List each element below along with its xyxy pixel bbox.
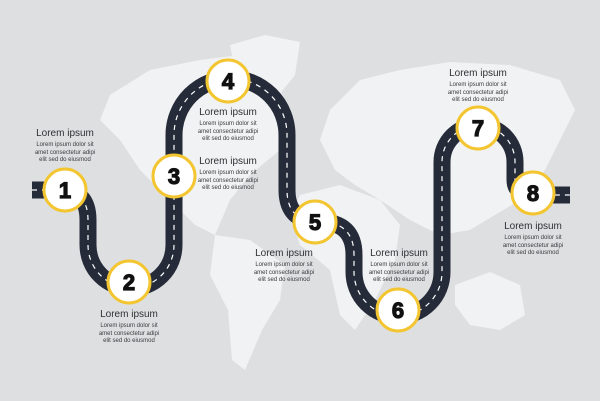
circle 3	[153, 155, 195, 197]
label 5: Lorem ipsum dolor sit	[255, 262, 313, 268]
label 6: elit sed do eiusmod	[373, 277, 425, 283]
circle 2: 2	[123, 270, 135, 295]
label 5: Lorem ipsum	[255, 248, 313, 259]
label 3: Lorem ipsum dolor sit	[199, 170, 257, 176]
circle 4: 4	[222, 69, 235, 94]
circle 2	[108, 261, 150, 303]
circle 8	[512, 172, 554, 214]
label 1	[35, 128, 95, 163]
label 7: Lorem ipsum	[449, 68, 507, 79]
label 4: amet consectetur adipi	[198, 128, 258, 134]
label 6: amet consectetur adipi	[369, 270, 429, 276]
label 7: elit sed do eiusmod	[452, 97, 504, 103]
label 6: Lorem ipsum dolor sit	[370, 262, 428, 268]
label 8: elit sed do eiusmod	[507, 250, 559, 256]
label 7	[448, 68, 508, 103]
label 8	[503, 221, 563, 256]
label 5: amet consectetur adipi	[254, 270, 314, 276]
label 8: Lorem ipsum	[504, 221, 562, 232]
circle 6	[377, 289, 419, 331]
label 1: Lorem ipsum dolor sit	[36, 142, 94, 148]
label 1: elit sed do eiusmod	[39, 157, 91, 163]
circle 5: 5	[309, 210, 321, 235]
label 2: elit sed do eiusmod	[103, 338, 155, 344]
label 1: Lorem ipsum	[36, 128, 94, 139]
label 2: Lorem ipsum	[100, 309, 158, 320]
label 8: amet consectetur adipi	[503, 242, 563, 248]
circle 7	[457, 107, 499, 149]
label 7: Lorem ipsum dolor sit	[449, 82, 507, 88]
label 4: elit sed do eiusmod	[202, 136, 254, 142]
label 4	[198, 107, 258, 142]
label 5	[254, 248, 314, 283]
label 6	[369, 248, 429, 283]
circle 7: 7	[472, 116, 484, 141]
label 3: elit sed do eiusmod	[202, 185, 254, 191]
label 4: Lorem ipsum	[199, 107, 257, 118]
south america	[210, 235, 285, 370]
circle 6: 6	[392, 298, 404, 323]
label 2: amet consectetur adipi	[99, 330, 159, 336]
label 8: Lorem ipsum dolor sit	[504, 235, 562, 241]
north america	[100, 55, 290, 235]
greenland	[230, 35, 300, 100]
africa	[290, 185, 400, 330]
label 3: amet consectetur adipi	[198, 178, 258, 184]
circle 8: 8	[527, 181, 539, 206]
circle 5	[294, 201, 336, 243]
label 5: elit sed do eiusmod	[258, 277, 310, 283]
label 3: Lorem ipsum	[199, 156, 257, 167]
label 6: Lorem ipsum	[370, 248, 428, 259]
circle 3: 3	[168, 164, 180, 189]
circle 4	[207, 60, 249, 102]
label 2: Lorem ipsum dolor sit	[100, 323, 158, 329]
label 1: amet consectetur adipi	[35, 150, 95, 156]
label 7: amet consectetur adipi	[448, 90, 508, 96]
europe asia	[320, 62, 575, 235]
circle 1	[44, 169, 86, 211]
label 2	[99, 309, 159, 344]
label 3	[198, 156, 258, 191]
circle 1: 1	[59, 178, 71, 203]
label 4: Lorem ipsum dolor sit	[199, 121, 257, 127]
australia	[455, 272, 525, 330]
